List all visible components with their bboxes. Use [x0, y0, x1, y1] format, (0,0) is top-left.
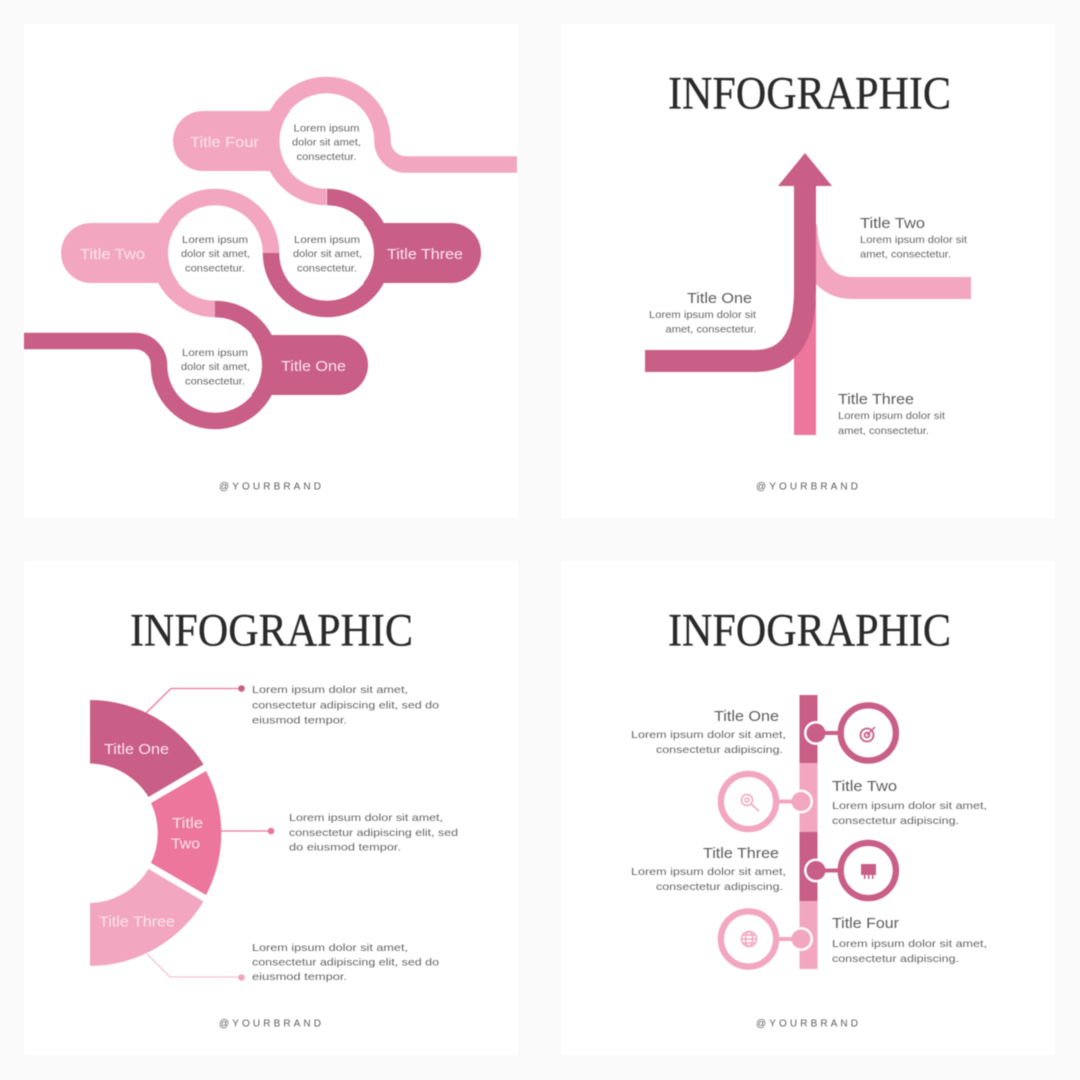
text: Title Three: Title Three [703, 845, 779, 862]
segment: Title Two: Two [171, 836, 200, 852]
text: Two: Lorem ipsum [182, 234, 248, 246]
pill: Three [327, 223, 481, 283]
panel: merging arrow [561, 24, 1055, 518]
text: One: dolor sit amet, [181, 361, 250, 373]
text: Title Two: Lorem ipsum dolor sit [860, 234, 967, 246]
segment: Title Three: Title Three [99, 914, 175, 930]
text: Three: consectetur. [297, 262, 357, 274]
title: INFOGRAPHIC [668, 68, 951, 120]
panel: vertical timeline [561, 561, 1055, 1055]
circle: Three [280, 206, 374, 300]
label: Title Two: Title Two [80, 246, 145, 263]
text: One: Lorem ipsum [182, 347, 248, 359]
text: Title Three [838, 391, 945, 437]
title: INFOGRAPHIC [668, 606, 951, 656]
ribbon: One [24, 309, 271, 421]
text: item one [252, 684, 439, 726]
text: Two: dolor sit amet, [181, 248, 250, 260]
icon: globe [742, 932, 756, 946]
stem: Title Three [794, 300, 816, 435]
text: Title Three: consectetur adipiscing. [656, 881, 783, 893]
text: Title One: Lorem ipsum dolor sit amet, [631, 729, 786, 741]
text: Title One: amet, consectetur. [666, 324, 756, 336]
brand handle: @YOURBRAND [219, 1018, 321, 1030]
text: item two: Lorem ipsum dolor sit amet, [289, 812, 443, 824]
text: Title One: Title One [687, 290, 752, 307]
text: Title Two: consectetur adipiscing. [832, 815, 959, 827]
connector: Title One [146, 685, 245, 713]
text: Title Two [860, 215, 967, 260]
pill: One [215, 335, 368, 395]
text: Four: consectetur. [296, 151, 356, 163]
icon: presentation chart [861, 864, 876, 879]
pill: Four [173, 111, 326, 171]
text: One: consectetur. [185, 376, 245, 388]
text: Three: dolor sit amet, [293, 248, 362, 260]
text: item two: consectetur adipiscing elit, sed [289, 827, 458, 839]
text: item three: consectetur adipiscing elit, sed do [252, 956, 439, 968]
label: Title Three: Title Three [387, 246, 463, 263]
text: item one: consectetur adipiscing elit, sed do [252, 700, 439, 712]
circle: Two [168, 206, 262, 300]
text: One [181, 347, 250, 388]
text: Title Three: Lorem ipsum dolor sit amet, [631, 866, 786, 878]
text: item two: do eiusmod tempor. [289, 842, 401, 854]
ribbon: Two [159, 197, 271, 309]
text: Two: consectetur. [185, 262, 245, 274]
segment: Title One: Title One [104, 741, 169, 758]
brand handle: @YOURBRAND [756, 1018, 858, 1030]
text: Four: dolor sit amet, [292, 136, 361, 148]
title: INFOGRAPHIC [130, 606, 413, 656]
text: Title Two: Lorem ipsum dolor sit amet, [832, 800, 987, 812]
text: Three [293, 234, 362, 274]
connector: Title Three [147, 954, 245, 981]
timeline bar [800, 695, 818, 969]
ribbon: Three [271, 197, 383, 309]
text: item three: Lorem ipsum dolor sit amet, [252, 942, 408, 954]
panel: winding path [24, 24, 518, 518]
label: Title One: Title One [281, 358, 346, 375]
node: Title Two [721, 774, 813, 829]
icon: magnifier [742, 794, 759, 811]
text: Three: Lorem ipsum [294, 234, 360, 246]
arrow: Title One [645, 153, 832, 361]
segment: Title Two: Title [172, 815, 203, 832]
branch: Title Two [806, 225, 971, 288]
segment: Title Two [151, 771, 221, 895]
text: Title Three: Title Three [838, 391, 914, 408]
text: Title One [631, 708, 786, 756]
text: item one: Lorem ipsum dolor sit amet, [252, 684, 408, 696]
circle: One [168, 318, 262, 412]
text: Title Two [832, 778, 987, 827]
text: Two [181, 234, 250, 274]
text: Title Two: Title Two [860, 215, 925, 232]
node: Title Four [721, 911, 813, 967]
text: Title Four: Title Four [832, 915, 899, 932]
text: item three: eiusmod tempor. [252, 971, 347, 983]
text: Title Three: amet, consectetur. [838, 425, 929, 437]
text: Title Two: Title Two [832, 778, 897, 795]
connector: Title Two [220, 828, 274, 834]
text: Title Three [631, 845, 786, 893]
label: Title Four: Title Four [190, 134, 259, 151]
circle: Four [280, 94, 374, 188]
pill: Two [61, 223, 215, 283]
text: Title One [649, 290, 756, 336]
text: Title One: Lorem ipsum dolor sit [649, 309, 756, 321]
node: Title One [804, 705, 896, 761]
segment: Title One [90, 700, 204, 797]
text: Title Four: consectetur adipiscing. [832, 953, 959, 965]
text: item three [252, 942, 439, 983]
text: Four: Lorem ipsum [294, 122, 360, 134]
text: Title One: Title One [714, 708, 779, 725]
text: Title One: consectetur adipiscing. [656, 744, 783, 756]
text: Four [292, 122, 361, 163]
text: Title Two: amet, consectetur. [860, 248, 951, 260]
segment: Title Three [90, 869, 204, 966]
text: item one: eiusmod tempor. [252, 714, 347, 726]
text: item two [289, 812, 458, 854]
text: Title Three: Lorem ipsum dolor sit [838, 410, 945, 422]
text: Title Four: Lorem ipsum dolor sit amet, [832, 938, 987, 950]
brand handle: @YOURBRAND [219, 482, 321, 492]
node: Title Three [804, 843, 896, 898]
ribbon: Four [271, 85, 517, 197]
panel: half donut [24, 561, 518, 1055]
icon: target [860, 727, 875, 742]
brand handle: @YOURBRAND [756, 482, 858, 492]
text: Title Four [832, 915, 987, 965]
